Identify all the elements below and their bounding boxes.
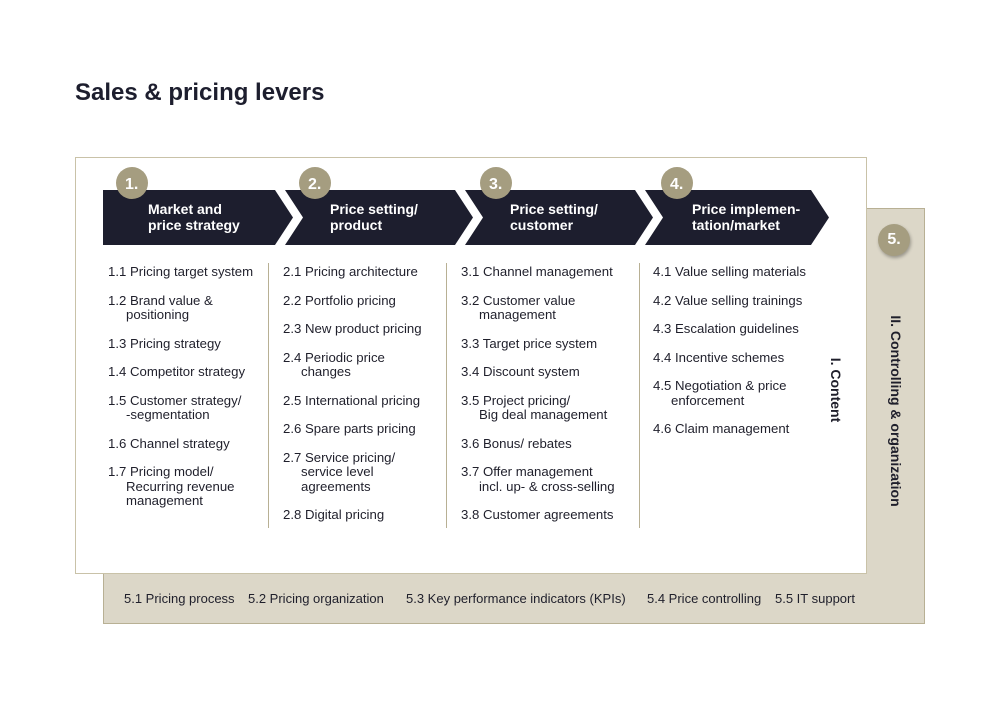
panel: controlling & organization (back) <box>103 208 925 624</box>
column 3: 3.8 Customer agreements <box>461 507 613 522</box>
column 3: 3.7 Offer management <box>461 464 593 479</box>
column 3: incl. up- & cross-selling <box>479 478 615 494</box>
column 3 <box>461 264 615 522</box>
column 1: -segmentation <box>126 407 210 422</box>
chevron bar: Market and <box>148 201 222 217</box>
label: II. Controlling & organization: II. Controlling & organization <box>888 315 904 507</box>
column 3: 3.3 Target price system <box>461 336 597 350</box>
bottom items: 5.3 Key performance indicators (KPIs) <box>406 591 626 606</box>
column 2: service level <box>301 464 374 479</box>
bottom items: 5.1 Pricing process <box>124 591 235 606</box>
column 2: agreements <box>301 478 371 494</box>
title: Sales & pricing levers <box>75 79 324 106</box>
chevron bar: customer <box>510 217 574 233</box>
column 1: Recurring revenue <box>126 478 234 494</box>
column 1: 1.4 Competitor strategy <box>108 364 245 379</box>
chevron bar <box>103 167 829 245</box>
column 3: Big deal management <box>479 407 607 422</box>
column 3: 3.1 Channel management <box>461 264 613 279</box>
icon: number 5 <box>878 224 910 256</box>
column 1: 1.1 Pricing target system <box>108 264 253 279</box>
column 3: 3.6 Bonus/ rebates <box>461 436 572 450</box>
label: I. Content: I. Content <box>828 358 844 422</box>
column 2: 2.6 Spare parts pricing <box>283 421 416 436</box>
column 4: enforcement <box>671 392 744 408</box>
chevron bar: 4. <box>670 176 683 193</box>
column 2: 2.7 Service pricing/ <box>283 450 395 464</box>
column 4: 4.2 Value selling trainings <box>653 292 802 308</box>
column 4: 4.4 Incentive schemes <box>653 350 784 364</box>
panel: content (front) <box>75 157 867 574</box>
column 2 <box>283 264 422 522</box>
chevron bar: tation/market <box>692 217 780 233</box>
chevron bar: Price setting/ <box>330 201 418 217</box>
column 2: 2.2 Portfolio pricing <box>283 292 396 308</box>
bottom items: 5.5 IT support <box>775 591 855 606</box>
chevron bar: Price implemen- <box>692 201 800 217</box>
column 1: 1.2 Brand value & <box>108 292 213 308</box>
dividers <box>268 263 269 528</box>
column 1: 1.3 Pricing strategy <box>108 336 221 350</box>
icon: number 5: 5. <box>887 231 901 248</box>
column 2: 2.3 New product pricing <box>283 321 422 336</box>
column 4: 4.5 Negotiation & price <box>653 378 786 393</box>
column 1: 1.5 Customer strategy/ <box>108 392 241 408</box>
bottom items: 5.2 Pricing organization <box>248 591 384 606</box>
column 3: 3.4 Discount system <box>461 364 580 379</box>
column 3: management <box>479 307 556 322</box>
column 1: 1.6 Channel strategy <box>108 436 230 450</box>
column 2: 2.5 International pricing <box>283 392 420 408</box>
chevron bar: 3. <box>489 176 502 193</box>
column 1: 1.7 Pricing model/ <box>108 464 214 479</box>
column 4: 4.3 Escalation guidelines <box>653 321 799 336</box>
chevron bar: 1. <box>125 176 138 193</box>
bottom items: 5.4 Price controlling <box>647 591 761 606</box>
chevron bar: price strategy <box>148 217 240 233</box>
column 3: 3.2 Customer value <box>461 292 575 308</box>
chevron bar: product <box>330 217 382 233</box>
column 2: 2.8 Digital pricing <box>283 507 384 522</box>
column 3: 3.5 Project pricing/ <box>461 392 570 408</box>
column 2: changes <box>301 364 351 379</box>
column 4: 4.1 Value selling materials <box>653 264 806 279</box>
column 1: management <box>126 493 203 508</box>
chevron bar: 2. <box>308 176 321 193</box>
column 4 <box>653 264 806 436</box>
chevron bar: Price setting/ <box>510 201 598 217</box>
column 4: 4.6 Claim management <box>653 421 789 436</box>
column 1 <box>108 264 253 508</box>
column 2: 2.1 Pricing architecture <box>283 264 418 279</box>
bottom items <box>124 591 855 606</box>
column 2: 2.4 Periodic price <box>283 350 385 364</box>
column 1: positioning <box>126 307 189 322</box>
